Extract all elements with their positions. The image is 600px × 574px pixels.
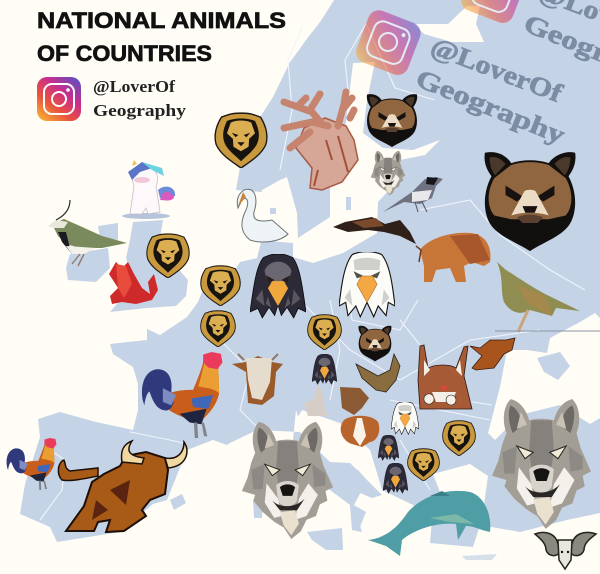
lion: Bulgaria bbox=[408, 449, 439, 481]
owl bbox=[356, 354, 400, 392]
lynx bbox=[418, 345, 472, 409]
title: OF COUNTRIES bbox=[37, 41, 212, 66]
nightingale bbox=[495, 262, 600, 332]
swan bbox=[237, 189, 288, 242]
white eagle: Poland bbox=[339, 252, 395, 317]
instagram handle: @LoverOf bbox=[93, 77, 176, 96]
rooster: Portugal bbox=[7, 438, 56, 490]
ram bbox=[535, 532, 596, 569]
lapwing bird bbox=[48, 200, 127, 266]
lion: England bbox=[147, 234, 189, 278]
lion: Romania/Moldova bbox=[443, 421, 475, 456]
instagram handle bbox=[93, 77, 187, 120]
watermark: instagram icon and handle bbox=[353, 0, 600, 150]
Italy boot bbox=[300, 432, 382, 532]
Sardinia and Sicily bbox=[253, 500, 343, 550]
wolf: Italy bbox=[242, 422, 333, 539]
lion: Luxembourg or Czechia bbox=[308, 315, 341, 350]
rabbit/goat bbox=[304, 384, 328, 416]
watermark: instagram icon and handle: Geography bbox=[412, 64, 569, 150]
lion: Denmark position bbox=[215, 113, 267, 168]
wolf small bbox=[371, 151, 405, 196]
British Isles bbox=[110, 220, 188, 312]
black eagle: Albania bbox=[383, 463, 408, 493]
lion: Belgium bbox=[201, 311, 235, 347]
unicorn bbox=[122, 160, 175, 219]
eagle small: Serbia bbox=[391, 402, 419, 434]
black eagle: Germany bbox=[250, 254, 306, 318]
Italy west cleanup bbox=[296, 410, 382, 490]
bull: Spain bbox=[58, 441, 187, 532]
borders bbox=[40, 24, 585, 520]
Norwegian sea bbox=[299, 0, 334, 48]
Aegean bbox=[433, 464, 488, 518]
title bbox=[37, 8, 286, 66]
bison bbox=[416, 233, 490, 282]
black eagle small: Montenegro bbox=[378, 435, 399, 461]
flying eagle: Latvia bbox=[333, 217, 416, 244]
bear bbox=[367, 94, 417, 147]
Balearic islands bbox=[170, 494, 186, 510]
Skagerrak, Baltic and Gulf of Bothnia bbox=[257, 62, 440, 263]
title: NATIONAL ANIMALS bbox=[37, 8, 286, 33]
wagtail bird bbox=[383, 177, 443, 212]
big bear bbox=[485, 152, 575, 251]
black eagle small: Austria bbox=[312, 354, 337, 384]
icon: instagram logo bbox=[37, 77, 81, 121]
watermark: instagram icon and handle: @LoverOf bbox=[427, 32, 566, 108]
dog bbox=[341, 416, 379, 447]
instagram handle: Geography bbox=[93, 101, 187, 120]
White Sea bbox=[414, 6, 484, 42]
dolphin bbox=[368, 491, 490, 556]
marten bbox=[340, 387, 369, 415]
cow bbox=[232, 354, 283, 405]
lion: Netherlands bbox=[201, 266, 240, 306]
Cyprus bbox=[462, 554, 497, 560]
red dragon bbox=[109, 262, 158, 304]
rooster: France bbox=[142, 352, 222, 438]
Black Sea and Azov bbox=[488, 313, 600, 440]
small bull bbox=[470, 338, 515, 370]
bear: Slovakia position bbox=[359, 326, 391, 361]
moose bbox=[284, 92, 358, 190]
wolf: Turkey bbox=[492, 399, 591, 529]
